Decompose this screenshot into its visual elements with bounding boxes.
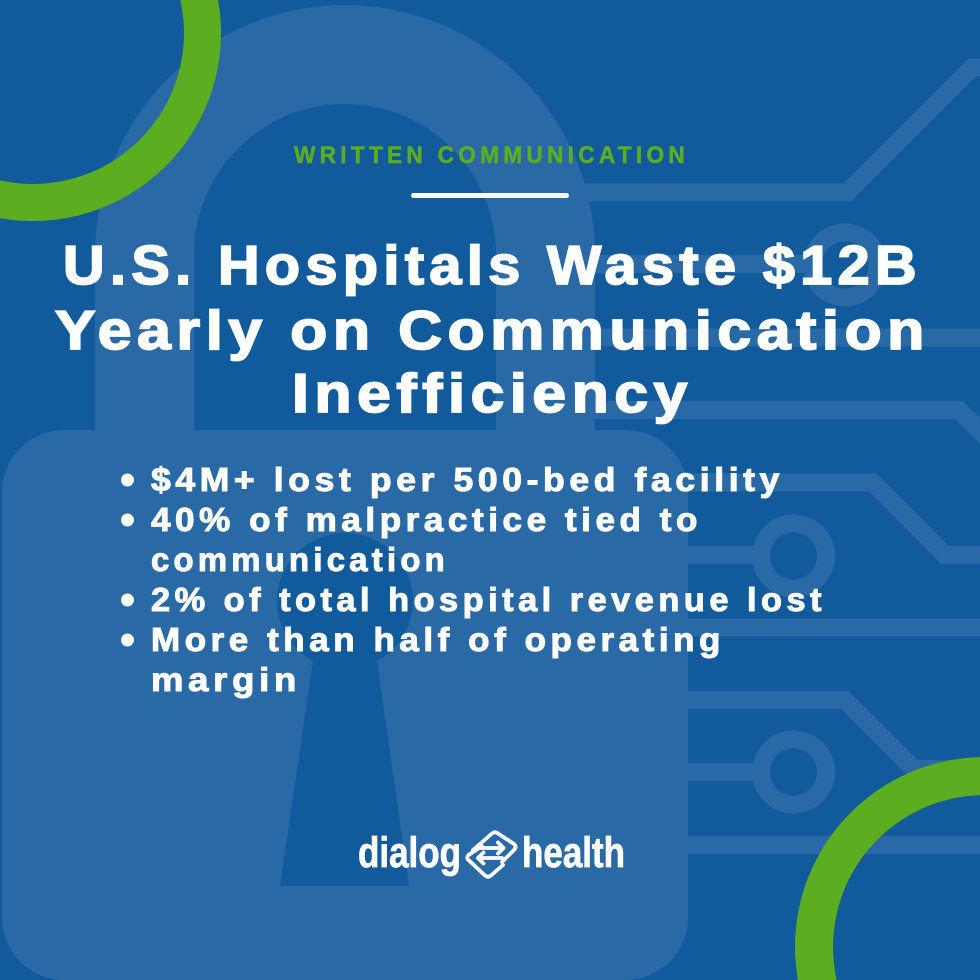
padlock body bbox=[2, 430, 688, 980]
bullet: operating margin bbox=[122, 621, 725, 698]
bullet: 40% of malpractice: communication bbox=[151, 541, 449, 578]
bullet: operating margin: margin bbox=[151, 661, 301, 698]
title: Yearly on Communication bbox=[55, 299, 930, 361]
logo wordmark: dialog: dialog bbox=[358, 829, 461, 877]
eyebrow heading: WRITTEN COMMUNICATION bbox=[294, 142, 689, 169]
bullet: 2% of revenue: 2% of total hospital revenue lost bbox=[151, 581, 826, 618]
circuit board pattern bbox=[560, 68, 980, 845]
bullet: 40% of malpractice: 40% of malpractice tied to bbox=[151, 501, 702, 538]
green ring: top left bbox=[0, 0, 221, 221]
divider bbox=[411, 193, 569, 198]
green ring: bottom right bbox=[795, 757, 980, 980]
title: U.S. Hospitals Waste $12B bbox=[63, 234, 922, 296]
bullet: $4M+ lost: $4M+ lost per 500-bed facility bbox=[151, 461, 784, 498]
logo: dialog health bbox=[358, 829, 625, 877]
keyhole bbox=[277, 533, 413, 886]
logo icon: exchange arrows bbox=[467, 832, 516, 877]
logo wordmark: health: health bbox=[522, 829, 625, 877]
bullet list bbox=[122, 461, 826, 698]
padlock bbox=[2, 5, 688, 980]
bullet: operating margin: More than half of operating bbox=[151, 621, 725, 658]
padlock shackle bbox=[95, 5, 595, 440]
bullet: 40% of malpractice bbox=[122, 501, 702, 578]
title: Inefficiency bbox=[292, 362, 693, 424]
title bbox=[55, 234, 930, 424]
